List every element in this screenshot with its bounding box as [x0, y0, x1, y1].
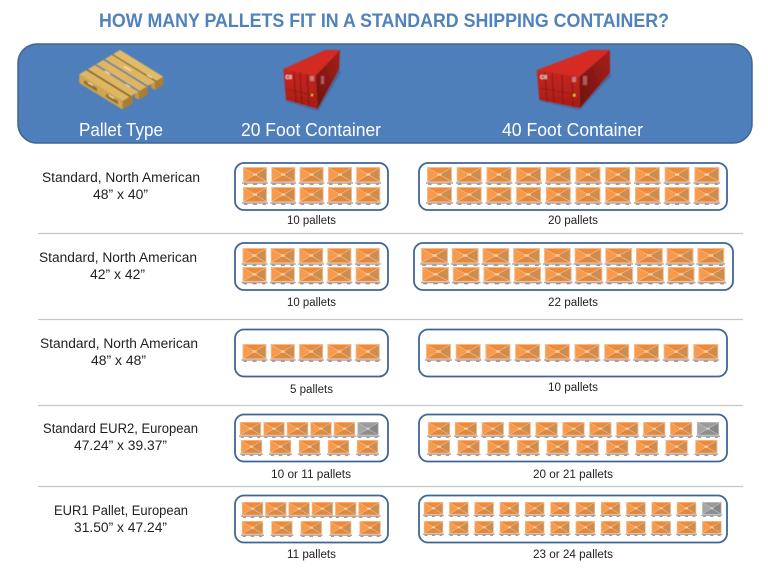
count 20 foot: 10 pallets	[287, 215, 336, 227]
row label: 47.24” x 39.37”	[74, 438, 167, 453]
count 20 foot: 10 pallets	[287, 297, 336, 309]
count 40 foot: 20 pallets	[548, 215, 598, 227]
row label	[43, 421, 198, 453]
label: 40 foot container: 40 Foot Container	[502, 120, 643, 140]
count 20 foot: 10 or 11 pallets	[271, 469, 351, 481]
row label	[40, 336, 198, 368]
40 foot load: 22 pallets	[414, 243, 733, 290]
row label: 31.50” x 47.24”	[74, 520, 167, 535]
label: 20 foot container: 20 Foot Container	[241, 120, 381, 140]
40 foot load: 10 pallets	[419, 330, 727, 376]
container lettering: CII	[540, 75, 548, 81]
icon: 40 foot container	[537, 50, 612, 110]
row label: Standard, North American	[42, 170, 200, 185]
row 4: standard EUR2 european	[43, 414, 727, 481]
row 1: standard north american 48 x 40	[42, 163, 727, 227]
40 foot load: 20 or 21 pallets	[419, 414, 727, 462]
row 2: standard north american 42 x 42	[39, 243, 733, 309]
40 foot load: 20 pallets	[419, 163, 727, 210]
row label	[39, 250, 197, 282]
20 foot load: 5 pallets	[235, 330, 388, 376]
40 foot load: 23 or 24 pallets	[419, 496, 727, 542]
row label: 42” x 42”	[90, 267, 145, 282]
row label: 48” x 40”	[93, 187, 148, 202]
row label: EUR1 Pallet, European	[54, 503, 188, 518]
header panel	[18, 44, 752, 143]
row label	[54, 503, 188, 535]
icon: wooden pallet	[79, 50, 163, 110]
count 40 foot: 23 or 24 pallets	[533, 549, 613, 561]
count 20 foot: 11 pallets	[287, 549, 336, 561]
label: pallet type: Pallet Type	[79, 120, 163, 140]
row label	[42, 170, 200, 202]
title: HOW MANY PALLETS FIT IN A STANDARD SHIPPING CONTAINER?	[99, 11, 669, 32]
20 foot load: 10 pallets	[235, 163, 388, 210]
count 20 foot: 5 pallets	[290, 384, 333, 396]
row 5: EUR1 pallet european	[54, 496, 727, 561]
row label: Standard, North American	[39, 250, 197, 265]
count 40 foot: 10 pallets	[548, 382, 598, 394]
row label: Standard, North American	[40, 336, 198, 351]
row 3: standard north american 48 x 48	[40, 330, 727, 396]
container lettering: CII	[286, 75, 292, 81]
count 40 foot: 22 pallets	[548, 297, 598, 309]
20 foot load: 11 pallets	[235, 496, 388, 542]
count 40 foot: 20 or 21 pallets	[533, 469, 613, 481]
row label: Standard EUR2, European	[43, 421, 198, 436]
icon: 20 foot container	[283, 50, 341, 111]
row label: 48” x 48”	[91, 353, 146, 368]
20 foot load: 10 or 11 pallets	[235, 414, 388, 462]
20 foot load: 10 pallets	[235, 243, 388, 290]
